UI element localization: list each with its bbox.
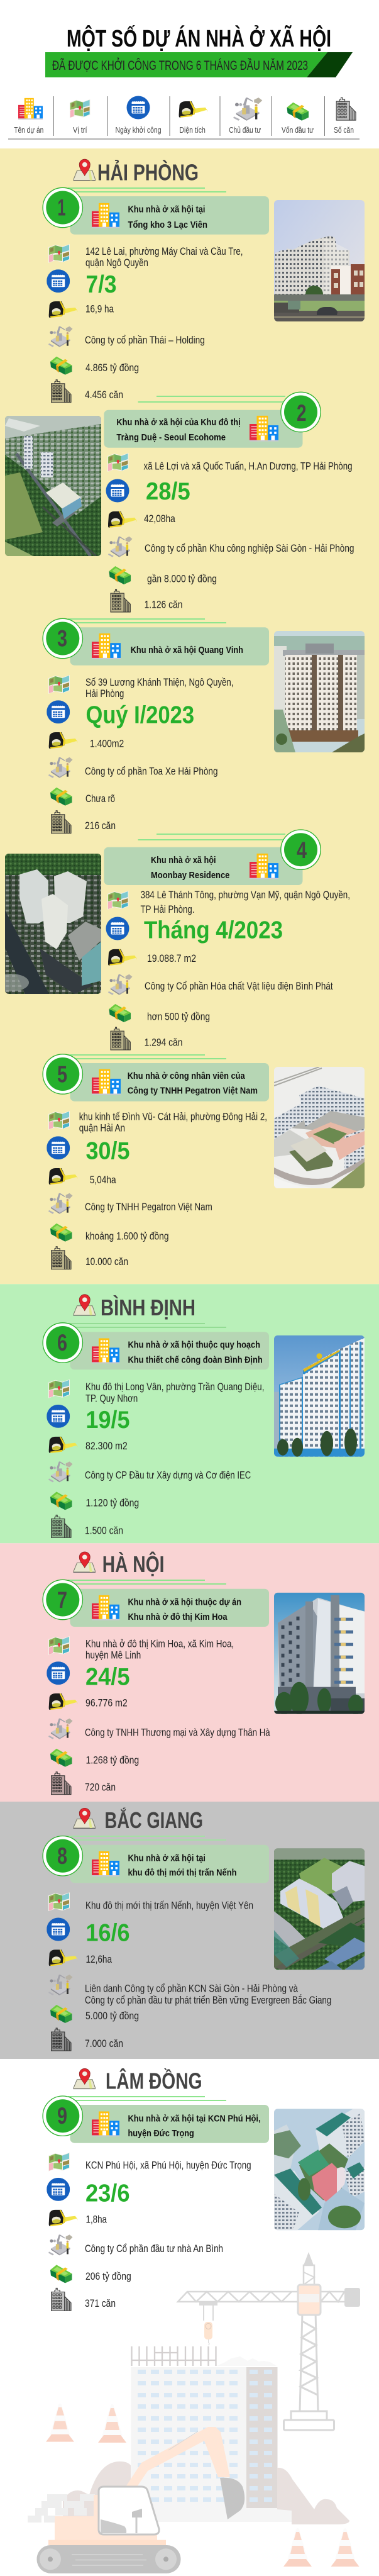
legend: start date: Ngày khởi công bbox=[116, 125, 161, 135]
developer icon bbox=[108, 974, 133, 995]
project name: Khu nhà ở xã hội thuộc quy hoạch bbox=[128, 1340, 260, 1351]
location: huyện Mê Linh bbox=[85, 1650, 141, 1661]
excavator bbox=[36, 2427, 244, 2573]
dirt mounds bbox=[63, 2462, 349, 2525]
location icon bbox=[107, 453, 128, 472]
start date: 19/5 bbox=[85, 1407, 129, 1434]
number badge bbox=[281, 392, 321, 432]
legend: project name bbox=[14, 98, 43, 135]
capital: hơn 500 tỷ đồng bbox=[147, 1012, 210, 1023]
capital: 1.268 tỷ đồng bbox=[85, 1754, 139, 1766]
developer: Công ty cổ phần Thái – Holding bbox=[85, 335, 205, 346]
developer: Công ty TNHH Pegatron Việt Nam bbox=[85, 1202, 212, 1213]
header box bbox=[70, 1332, 269, 1369]
location icon bbox=[48, 675, 70, 694]
legend: capital: Vốn đầu tư bbox=[282, 125, 314, 135]
legend: start date bbox=[116, 96, 161, 135]
project name bbox=[128, 204, 207, 230]
project 5 bbox=[43, 1054, 365, 1269]
photo bbox=[274, 1848, 365, 1970]
project name: Khu thiết chế công đoàn Bình Định bbox=[128, 1355, 263, 1366]
capital: 4.865 tỷ đồng bbox=[85, 362, 139, 374]
developer icon bbox=[48, 326, 73, 347]
area: 96.776 m2 bbox=[85, 1698, 128, 1709]
money icon bbox=[109, 1004, 131, 1022]
start date: 7/3 bbox=[85, 271, 117, 298]
units icon bbox=[52, 1247, 71, 1269]
photo bbox=[274, 1335, 365, 1457]
units: 1.126 căn bbox=[145, 599, 182, 611]
header box bbox=[70, 1063, 269, 1101]
developer bbox=[85, 1983, 331, 2006]
heading: Binh Dinh bbox=[73, 1295, 195, 1320]
building icon bbox=[92, 1595, 119, 1620]
header box bbox=[70, 2105, 269, 2143]
developer: Công ty CP Đầu tư Xây dựng và Cơ điện IEC bbox=[85, 1470, 251, 1481]
tower crane bbox=[178, 2252, 344, 2430]
developer: Liên danh Công ty cổ phần KCN Sài Gòn - Hải Phòng và bbox=[85, 1983, 299, 1995]
location icon bbox=[48, 1892, 70, 1911]
units icon bbox=[52, 2028, 71, 2051]
developer: Công ty Cổ phần Hóa chất Vật liệu điện Bình Phát bbox=[145, 981, 333, 992]
area: 1,8ha bbox=[85, 2214, 107, 2225]
location: KCN Phú Hội, xã Phú Hội, huyện Đức Trọng bbox=[85, 2160, 251, 2172]
number badge bbox=[43, 1054, 83, 1094]
capital: 5.000 tỷ đồng bbox=[85, 2010, 139, 2022]
location bbox=[85, 1638, 234, 1661]
developer: Công ty cổ phần Toa Xe Hải Phòng bbox=[85, 766, 217, 778]
number badge bbox=[281, 830, 321, 869]
panel: Hai Phong band bbox=[0, 148, 379, 1284]
heading: Ha Noi: HÀ NỘI bbox=[102, 1551, 165, 1577]
legend: area bbox=[179, 101, 208, 135]
project name: Khu nhà ở xã hội tại KCN Phú Hội, bbox=[128, 2113, 261, 2124]
location icon bbox=[48, 244, 70, 263]
area: 82.300 m2 bbox=[85, 1441, 128, 1452]
project name: Khu nhà ở xã hội tại bbox=[128, 204, 205, 215]
developer: Công ty TNHH Thương mại và Xây dựng Thân Hà bbox=[85, 1727, 270, 1738]
money icon bbox=[50, 1492, 72, 1510]
units icon bbox=[52, 811, 71, 834]
area: 1.400m2 bbox=[90, 739, 124, 750]
illustration: construction site bbox=[28, 2252, 360, 2573]
project 1 bbox=[43, 187, 365, 403]
location: TP. Quy Nhơn bbox=[85, 1393, 138, 1404]
photo bbox=[0, 854, 101, 994]
legend: location: Vị trí bbox=[73, 125, 87, 135]
tape icon bbox=[48, 1168, 78, 1185]
capital: khoảng 1.600 tỷ đồng bbox=[85, 1231, 168, 1242]
number badge: 2 bbox=[297, 400, 307, 426]
project name: Tràng Duệ - Seoul Ecohome bbox=[116, 432, 226, 443]
start date: Tháng 4/2023 bbox=[144, 917, 283, 944]
project name: khu đô thị mới thị trấn Nếnh bbox=[128, 1868, 236, 1878]
tape icon bbox=[48, 301, 78, 318]
location: Hải Phòng bbox=[85, 688, 124, 700]
capital: 206 tỷ đồng bbox=[85, 2271, 131, 2282]
heading: Binh Dinh: BÌNH ĐỊNH bbox=[101, 1295, 195, 1320]
calendar icon bbox=[47, 1405, 70, 1428]
project name: Moonbay Residence bbox=[151, 870, 229, 881]
start date: 23/6 bbox=[85, 2180, 129, 2207]
legend: developer bbox=[229, 98, 262, 135]
crane hook bbox=[199, 2302, 217, 2345]
tape icon bbox=[48, 1437, 78, 1453]
developer: Công ty Cổ phần đầu tư nhà An Bình bbox=[85, 2243, 223, 2255]
developer icon bbox=[48, 757, 73, 778]
money icon bbox=[50, 2265, 72, 2283]
capital: Chưa rõ bbox=[85, 793, 115, 805]
project name bbox=[116, 417, 241, 443]
number badge: 6 bbox=[57, 1330, 67, 1356]
number badge: 3 bbox=[57, 625, 67, 652]
project name bbox=[128, 1071, 258, 1096]
building icon bbox=[92, 1338, 119, 1363]
location icon bbox=[48, 1111, 70, 1130]
number badge: 7 bbox=[57, 1587, 67, 1613]
calendar icon bbox=[47, 2178, 70, 2201]
units: 216 căn bbox=[85, 820, 116, 832]
photo bbox=[274, 2109, 365, 2230]
units icon bbox=[111, 1027, 130, 1050]
tape icon bbox=[108, 511, 137, 528]
building icon bbox=[92, 633, 121, 659]
area: 5,04ha bbox=[90, 1174, 116, 1186]
panel: Binh Dinh band bbox=[0, 1284, 379, 1543]
number badge bbox=[43, 618, 83, 659]
building icon bbox=[92, 1851, 119, 1876]
project 4 bbox=[0, 830, 350, 1050]
area: 16,9 ha bbox=[85, 304, 114, 315]
photo bbox=[274, 200, 365, 321]
money icon bbox=[50, 788, 72, 806]
number badge bbox=[43, 1836, 83, 1876]
building icon bbox=[92, 1069, 121, 1095]
money icon bbox=[50, 357, 72, 375]
project 9 bbox=[43, 2096, 365, 2311]
developer icon bbox=[108, 537, 133, 557]
developer icon bbox=[48, 1193, 73, 1214]
location: TP Hải Phòng. bbox=[141, 904, 195, 915]
units: 4.456 căn bbox=[85, 389, 123, 401]
bricks bbox=[28, 2494, 95, 2523]
project 3 bbox=[43, 618, 365, 834]
location: quận Ngô Quyền bbox=[85, 257, 148, 269]
heading: Ha Noi bbox=[73, 1551, 165, 1577]
money icon bbox=[109, 566, 131, 584]
units icon bbox=[52, 2288, 71, 2311]
calendar icon bbox=[47, 1917, 70, 1941]
start date: 24/5 bbox=[85, 1663, 129, 1690]
units: 1.294 căn bbox=[145, 1037, 182, 1049]
location: Số 39 Lương Khánh Thiện, Ngô Quyền, bbox=[85, 677, 234, 688]
traffic cones bbox=[46, 2404, 360, 2567]
units icon bbox=[52, 1515, 71, 1537]
project name bbox=[128, 2113, 261, 2139]
project 7 bbox=[43, 1580, 365, 1795]
heading: Bac Giang: BẮC GIANG bbox=[104, 1807, 203, 1833]
header box bbox=[104, 847, 303, 885]
units: 1.500 căn bbox=[85, 1525, 123, 1536]
number badge: 4 bbox=[297, 837, 307, 863]
start date: 30/5 bbox=[85, 1137, 129, 1164]
calendar icon bbox=[106, 917, 129, 940]
number badge bbox=[43, 187, 83, 228]
building icon bbox=[92, 2111, 119, 2136]
project name: Tổng kho 3 Lạc Viên bbox=[128, 220, 207, 230]
project name: Khu nhà ở xã hội tại bbox=[128, 1853, 206, 1863]
number badge: 5 bbox=[57, 1062, 67, 1087]
area: 19.088.7 m2 bbox=[147, 953, 196, 964]
header box bbox=[70, 196, 269, 235]
legend: area: Diện tích bbox=[179, 125, 206, 135]
calendar icon bbox=[47, 1136, 70, 1159]
project 8 bbox=[43, 1836, 365, 2051]
header box bbox=[70, 1589, 269, 1627]
location icon bbox=[48, 1636, 70, 1655]
legend bbox=[8, 96, 360, 139]
tape icon bbox=[48, 732, 78, 749]
location icon bbox=[48, 2153, 70, 2172]
header box bbox=[70, 627, 269, 666]
area: 12,6ha bbox=[85, 1954, 113, 1965]
location: Khu nhà ở đô thị Kim Hoa, xã Kim Hoa, bbox=[85, 1638, 234, 1649]
money icon bbox=[50, 1224, 72, 1242]
location: khu kinh tế Đình Vũ- Cát Hải, phường Đông Hải 2, bbox=[79, 1112, 267, 1123]
location: quận Hải An bbox=[79, 1123, 125, 1134]
header box bbox=[70, 1845, 269, 1883]
units: 720 căn bbox=[85, 1782, 116, 1793]
legend: developer: Chủ đầu tư bbox=[229, 125, 261, 135]
units: 10.000 căn bbox=[85, 1256, 128, 1268]
number badge bbox=[43, 2096, 83, 2136]
project 2 bbox=[5, 392, 354, 612]
number badge: 1 bbox=[58, 195, 65, 221]
heading: Lam Dong bbox=[73, 2068, 202, 2094]
calendar icon bbox=[47, 1661, 70, 1685]
units icon bbox=[52, 1772, 71, 1795]
developer icon bbox=[48, 1461, 73, 1482]
project name bbox=[128, 1853, 236, 1878]
calendar icon bbox=[47, 269, 70, 293]
number badge: 8 bbox=[57, 1843, 67, 1869]
legend: location bbox=[70, 99, 91, 135]
legend: units bbox=[334, 98, 356, 135]
area: 42,08ha bbox=[144, 513, 175, 525]
number badge: 9 bbox=[57, 2103, 67, 2129]
start date: 16/6 bbox=[85, 1920, 129, 1947]
heading: Bac Giang bbox=[73, 1807, 203, 1833]
capital: 1.120 tỷ đồng bbox=[85, 1497, 139, 1508]
location bbox=[85, 246, 243, 269]
location bbox=[85, 1381, 264, 1404]
location: Khu đô thị Long Vân, phường Trần Quang Diệu, bbox=[85, 1381, 264, 1393]
legend: units: Số căn bbox=[334, 125, 354, 135]
units icon bbox=[111, 589, 130, 612]
start date: 28/5 bbox=[146, 478, 190, 505]
heading: Hai Phong bbox=[73, 159, 199, 186]
project name: Khu nhà ở đô thị Kim Hoa bbox=[128, 1612, 228, 1622]
building bbox=[131, 2346, 292, 2522]
location bbox=[141, 889, 350, 915]
project name: Khu nhà ở xã hội Quang Vinh bbox=[131, 645, 243, 655]
units: 7.000 căn bbox=[85, 2038, 123, 2049]
photo bbox=[274, 1067, 365, 1188]
photo bbox=[274, 1593, 365, 1715]
photo bbox=[274, 631, 365, 752]
project name: Khu nhà ở công nhân viên của bbox=[128, 1071, 245, 1081]
legend: capital bbox=[282, 103, 314, 135]
project name: Khu nhà ở xã hội của Khu đô thị bbox=[116, 417, 241, 428]
heading: Hai Phong: HẢI PHÒNG bbox=[97, 159, 199, 186]
project 6 bbox=[43, 1323, 365, 1537]
subtitle banner bbox=[45, 52, 353, 77]
project name bbox=[151, 855, 229, 881]
start date: Quý I/2023 bbox=[85, 702, 194, 728]
location: Khu đô thị mới thị trấn Nếnh, huyện Việt Yên bbox=[85, 1900, 253, 1911]
heading: Lam Dong: LÂM ĐỒNG bbox=[106, 2068, 202, 2094]
calendar icon bbox=[106, 479, 129, 502]
developer icon bbox=[48, 1719, 73, 1739]
tape icon bbox=[48, 2210, 78, 2226]
building icon bbox=[250, 854, 278, 879]
number badge bbox=[43, 1323, 83, 1363]
panel: Ha Noi band bbox=[0, 1543, 379, 1802]
calendar icon bbox=[47, 700, 70, 723]
tape icon bbox=[108, 949, 137, 966]
panel: Bac Giang band bbox=[0, 1802, 379, 2059]
location icon bbox=[107, 891, 128, 910]
project name: Khu nhà ở xã hội bbox=[151, 855, 216, 866]
legend: project name: Tên dự án bbox=[14, 125, 43, 135]
tape icon bbox=[48, 1693, 78, 1710]
location bbox=[79, 1112, 267, 1134]
building icon bbox=[92, 203, 119, 228]
project name: Khu nhà ở xã hội thuộc dự án bbox=[128, 1597, 241, 1608]
photo bbox=[5, 416, 101, 556]
units icon bbox=[52, 380, 71, 403]
units: 371 căn bbox=[85, 2298, 116, 2309]
developer icon bbox=[48, 1975, 73, 1995]
project name bbox=[128, 1597, 241, 1622]
money icon bbox=[50, 2005, 72, 2023]
location: 142 Lê Lai, phường Máy Chai và Cầu Tre, bbox=[85, 246, 243, 257]
tape icon bbox=[48, 1949, 78, 1966]
project name: huyện Đức Trọng bbox=[128, 2128, 194, 2139]
header box bbox=[104, 410, 303, 448]
capital: gần 8.000 tỷ đồng bbox=[147, 574, 217, 585]
location bbox=[85, 677, 234, 700]
location icon bbox=[48, 1380, 70, 1398]
number badge bbox=[43, 1580, 83, 1620]
developer icon bbox=[48, 2234, 73, 2255]
project name bbox=[128, 1340, 263, 1366]
project name: Công ty TNHH Pegatron Việt Nam bbox=[128, 1086, 258, 1096]
building icon bbox=[250, 416, 278, 442]
money icon bbox=[50, 1749, 72, 1767]
